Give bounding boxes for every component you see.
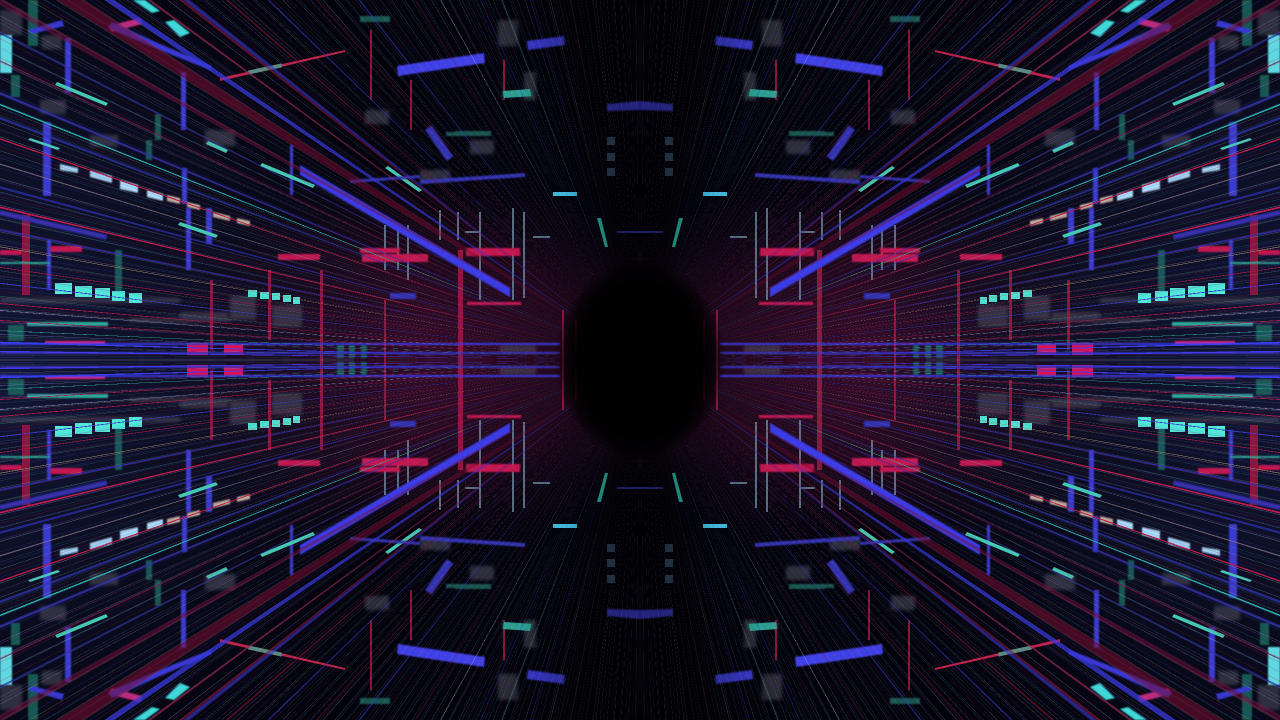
hot red bars <box>0 246 521 305</box>
vertical neon blue struts <box>43 38 293 290</box>
thin red slanted bar <box>220 50 345 81</box>
central teal and cyan marks <box>503 89 640 247</box>
diagonal blue beam <box>300 165 510 297</box>
pink square pair <box>187 343 243 355</box>
horizontal neon strips <box>0 262 560 354</box>
small square column <box>607 137 615 176</box>
pale blue and sand dash row <box>60 164 250 226</box>
dim grey panels <box>0 10 536 353</box>
radial streaks top-right <box>640 0 1280 360</box>
teal dash rows <box>28 82 422 238</box>
radial streaks top-left <box>0 0 640 360</box>
corner neon dashes <box>0 0 212 73</box>
violet slanted bars <box>397 36 640 111</box>
small cyan block row <box>248 290 300 304</box>
radial streaks bottom-right <box>640 360 1280 720</box>
pale wireframe cage <box>385 208 550 300</box>
bottom-right quadrant mirror <box>640 360 1280 720</box>
blue mid bars <box>0 125 525 299</box>
red structural columns <box>22 30 577 360</box>
dim teal blocks <box>8 0 532 358</box>
top-left quadrant <box>0 0 640 360</box>
radial streaks bottom-left <box>0 360 640 720</box>
bottom-left quadrant mirror <box>0 360 640 720</box>
large cyan block row <box>55 283 142 303</box>
top-right quadrant mirror <box>640 0 1280 360</box>
teal glint on slanted bar <box>248 64 282 74</box>
